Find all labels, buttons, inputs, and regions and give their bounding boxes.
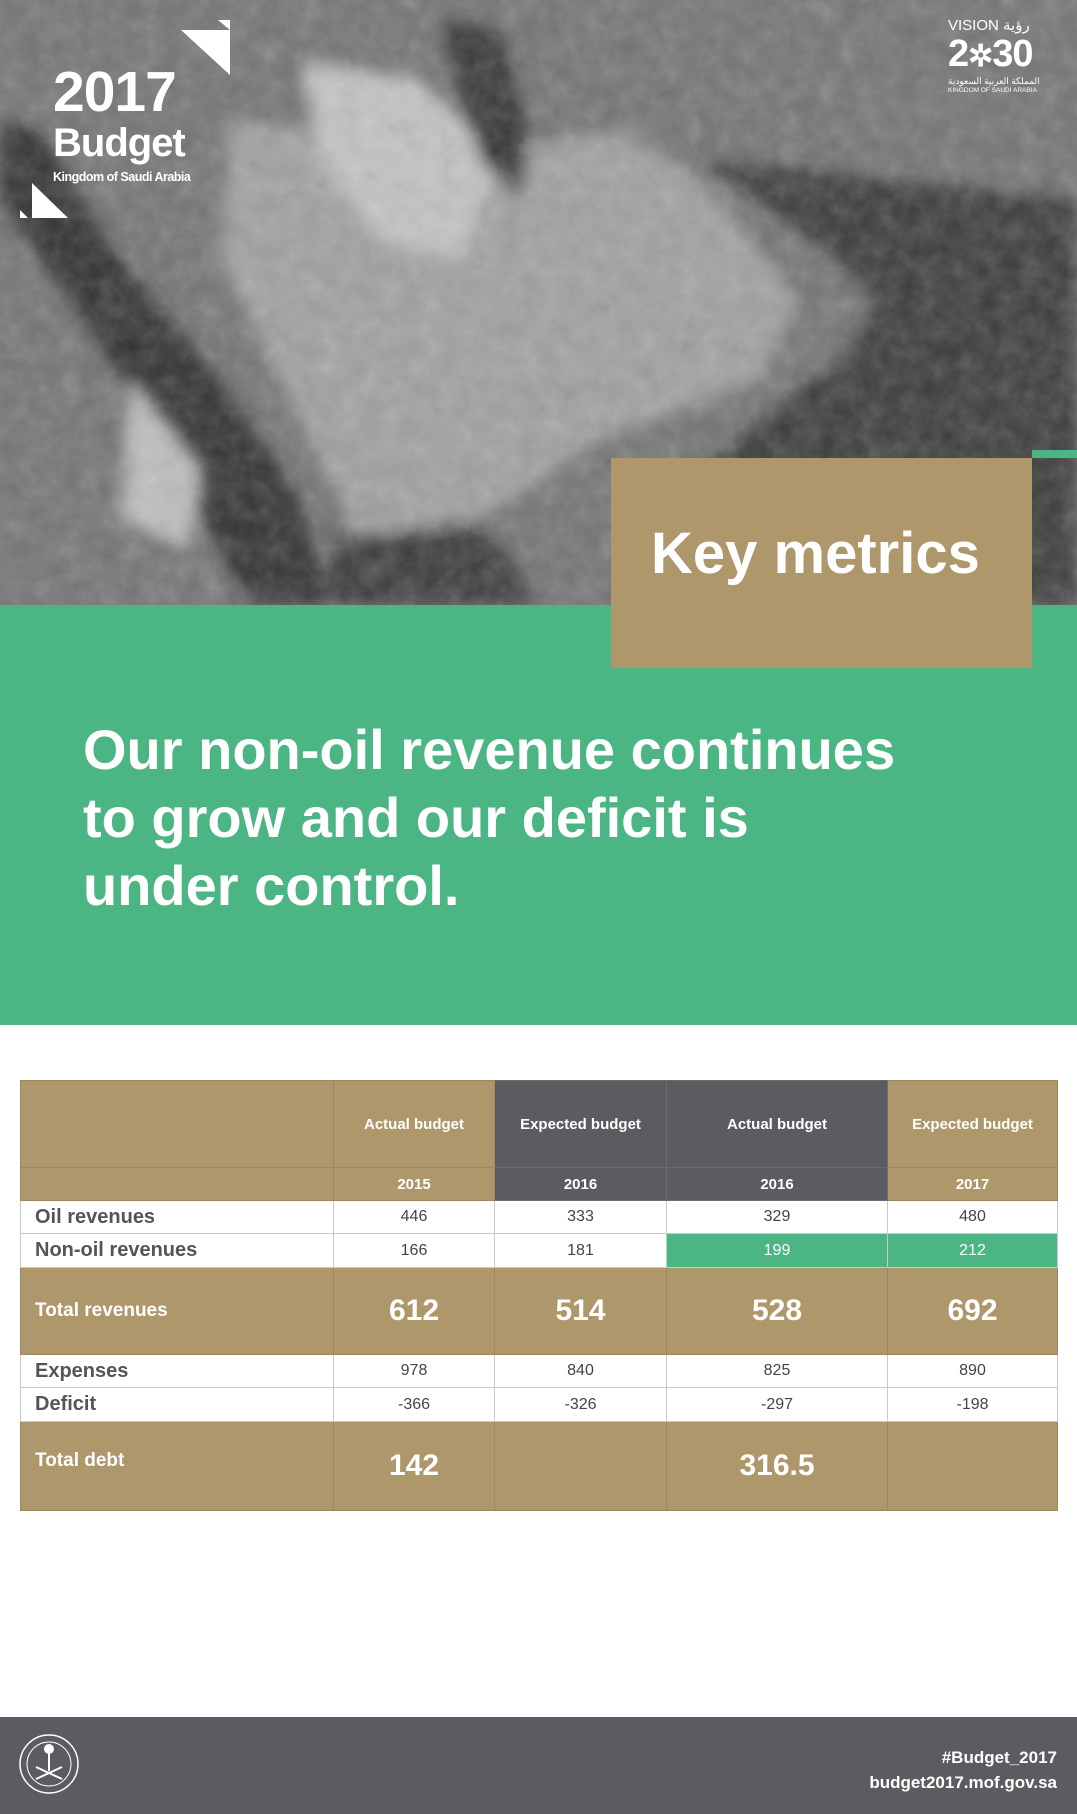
logo: Vision 2030: VISION رؤية (948, 14, 1030, 35)
table: key metrics: 446 (401, 1208, 427, 1225)
title: 2017 Budget logo: Budget (53, 121, 185, 165)
logo: Vision 2030: المملكة العربية السعودية (948, 76, 1040, 86)
panel: key metrics box (611, 458, 1032, 668)
table: key metrics: 840 (567, 1362, 594, 1379)
table: key metrics: Total revenues (35, 1300, 168, 1321)
logo: Vision 2030: 2✲30 (948, 33, 1033, 75)
table: key metrics: -326 (564, 1396, 597, 1412)
footer text: #Budget_2017 (942, 1748, 1057, 1767)
table: key metrics: Total debt (35, 1450, 124, 1471)
table: key metrics: 166 (401, 1242, 427, 1258)
title: 2017 Budget logo: 2017 (53, 60, 176, 124)
table: key metrics: Deficit (35, 1393, 96, 1415)
table: key metrics: 978 (401, 1362, 427, 1379)
icon: ministry emblem (19, 1734, 79, 1794)
table: key metrics: Expenses (35, 1360, 128, 1382)
table: key metrics: 2017 (956, 1176, 989, 1192)
table: key metrics: 2015 (397, 1176, 431, 1192)
title: 2017 Budget logo (20, 20, 230, 218)
heading: Key metrics: Key metrics (651, 521, 980, 586)
green accent strip (1032, 450, 1077, 458)
table: key metrics: Non-oil revenues (35, 1239, 197, 1261)
table: key metrics: Expected budget (520, 1116, 641, 1132)
table: key metrics: 199 (764, 1242, 790, 1258)
green section (0, 605, 1077, 1025)
table: key metrics: 692 (947, 1294, 998, 1327)
table: key metrics (20, 1080, 1058, 1511)
footer text (869, 1748, 1058, 1792)
table: key metrics: 528 (752, 1294, 802, 1327)
table: key metrics: -297 (761, 1396, 793, 1412)
table: key metrics: 480 (959, 1208, 986, 1225)
headline text: Our non-oil revenue continues to grow and our deficit is under control. (83, 718, 895, 917)
table: key metrics: 333 (567, 1208, 594, 1225)
table: key metrics: 612 (389, 1294, 439, 1327)
table: key metrics: 329 (764, 1208, 790, 1225)
table: key metrics: Actual budget (364, 1116, 464, 1132)
logo: Vision 2030: KINGDOM OF SAUDI ARABIA (948, 87, 1037, 94)
table: key metrics: Expected budget (912, 1116, 1033, 1132)
footer (0, 1717, 1077, 1814)
table: key metrics: 316.5 (739, 1449, 815, 1482)
table: key metrics: Oil revenues (35, 1206, 155, 1228)
table: key metrics: 825 (764, 1362, 790, 1379)
logo: Vision 2030 (948, 14, 1040, 94)
satellite image background (0, 0, 1077, 605)
footer text: budget2017.mof.gov.sa (869, 1773, 1057, 1792)
table: key metrics: -366 (398, 1396, 430, 1412)
title: 2017 Budget logo: Kingdom of Saudi Arabia (53, 170, 190, 184)
table: key metrics: 212 (959, 1242, 986, 1258)
table: key metrics: Actual budget (727, 1116, 827, 1132)
table: key metrics: 181 (567, 1242, 594, 1258)
table: key metrics: 2016 (564, 1176, 597, 1192)
table: key metrics: 2016 (760, 1176, 794, 1192)
table: key metrics: 514 (555, 1294, 606, 1327)
table: key metrics: 890 (959, 1362, 986, 1379)
table: key metrics: 142 (389, 1449, 439, 1482)
table: key metrics: -198 (956, 1396, 989, 1412)
